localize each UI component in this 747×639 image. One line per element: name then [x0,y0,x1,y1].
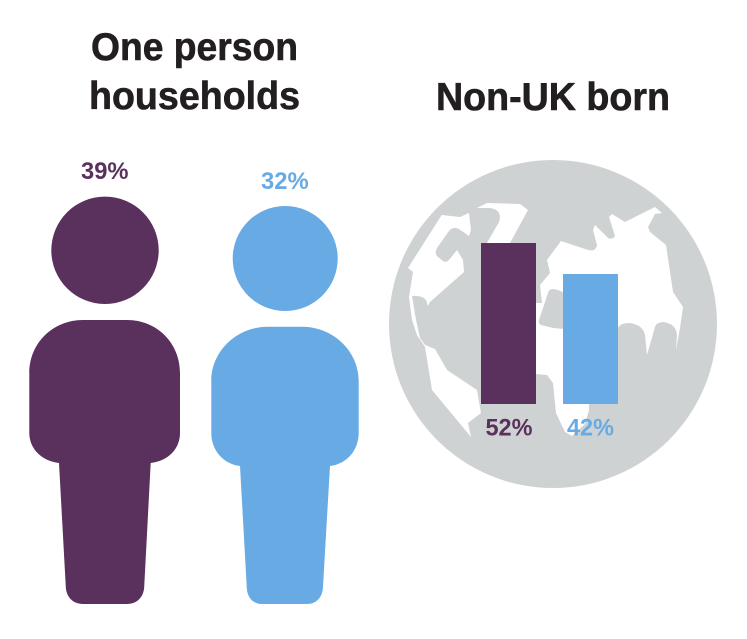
Eurasia and Africa [536,207,683,436]
heading: One person households: One person [91,26,298,69]
Mediterranean [539,289,564,329]
value: 39%: 39% [81,158,128,185]
panel: one person households [29,158,359,604]
heading: One person households [89,26,300,118]
blue person: 32% [211,168,359,604]
heading: Non-UK born: Non-UK born [436,76,670,119]
panel: non-UK born [389,160,717,488]
bar: 42% [563,274,618,442]
value: 52%: 52% [486,415,532,442]
Greenland [477,203,528,243]
value: 42%: 42% [567,415,614,442]
heading: One person households: households [89,75,300,118]
purple person: 39% [29,158,180,604]
icon: globe [389,160,717,488]
bar: 52% [481,243,536,442]
icon: blue person [211,206,359,604]
North America [408,213,481,437]
value: 32%: 32% [261,168,309,195]
icon: purple person [29,197,180,604]
